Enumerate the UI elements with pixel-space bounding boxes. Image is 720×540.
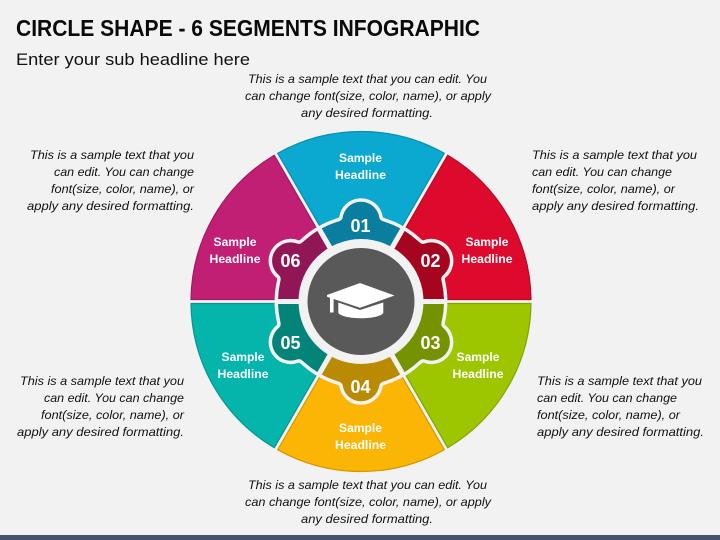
text block: top: can change font(size, color, name), or apply [245, 90, 492, 103]
segment headline 03 [452, 350, 504, 381]
text block: upper right: font(size, color, name), or [532, 183, 676, 196]
text block: lower right [537, 375, 704, 439]
inner segment 01 [322, 202, 400, 248]
inner segment 02 [387, 218, 467, 309]
circle diagram [172, 131, 550, 472]
text block: lower left: apply any desired formatting. [17, 426, 184, 439]
text block: top [245, 73, 492, 120]
text block: upper right: This is a sample text that you [532, 149, 698, 162]
segment headline 04 [335, 421, 386, 452]
text block: lower left: This is a sample text that you [20, 375, 185, 388]
text block: upper left: can edit. You can change [54, 166, 195, 179]
text block: upper left: font(size, color, name), or [51, 183, 195, 196]
segment headline 06 [210, 235, 261, 266]
wedge 01 [278, 131, 444, 249]
text block: top: any desired formatting. [301, 107, 433, 120]
segment headline 06: Headline [210, 252, 261, 266]
numbers: 05 [280, 333, 300, 353]
segment headline 04: Headline [335, 438, 386, 452]
numbered inner ring [255, 202, 467, 401]
text block: upper left: This is a sample text that you [30, 149, 195, 162]
text block: lower left: can edit. You can change [44, 392, 185, 405]
wedge 04 [278, 354, 444, 472]
wedge 06 [172, 144, 357, 347]
text block: lower right: can edit. You can change [537, 392, 678, 405]
segment headline 01 [335, 151, 386, 182]
text block: bottom: any desired formatting. [301, 513, 433, 526]
text block: lower left [17, 375, 185, 439]
text block: lower right: font(size, color, name), or [537, 409, 681, 422]
numbers: 04 [350, 377, 370, 397]
segment headline 01: Sample [339, 151, 382, 165]
subtitle: Enter your sub headline here [16, 50, 250, 69]
segment headline 02: Headline [462, 252, 513, 266]
text block: bottom: This is a sample text that you can edit. You [248, 479, 488, 492]
text block: upper left: apply any desired formatting. [27, 200, 194, 213]
numbers: 03 [420, 333, 440, 353]
wedge 02 [365, 144, 550, 347]
numbers: 06 [280, 251, 300, 271]
text block: upper right: apply any desired formatting. [532, 200, 699, 213]
text block: upper left [27, 149, 195, 213]
text block: lower right: This is a sample text that you [537, 375, 703, 388]
segment headline 03: Headline [452, 367, 504, 381]
text block: bottom: can change font(size, color, name), or apply [245, 496, 492, 509]
inner segment 03 [387, 294, 467, 385]
center hub ring [298, 239, 424, 364]
title: CIRCLE SHAPE - 6 SEGMENTS INFOGRAPHIC [16, 15, 480, 41]
segment headline 01: Headline [335, 168, 386, 182]
segment headline 03: Sample [456, 350, 500, 364]
segment headline 02: Sample [466, 235, 509, 249]
text block: top: This is a sample text that you can edit. You [248, 73, 488, 86]
text block: lower right: apply any desired formatting. [537, 426, 704, 439]
numbers [280, 216, 440, 397]
segment headline 04: Sample [339, 421, 382, 435]
inner segment 06 [255, 218, 335, 309]
segment headline 05: Sample [222, 350, 265, 364]
segment headline 05: Headline [218, 367, 269, 381]
text block: upper right: can edit. You can change [532, 166, 673, 179]
outer wedges [172, 131, 550, 472]
text block: upper right [532, 149, 699, 213]
center hub disc [308, 248, 414, 355]
segment headline 02 [462, 235, 513, 266]
text block: lower left: font(size, color, name), or [41, 409, 185, 422]
numbers: 02 [420, 251, 440, 271]
inner segment 05 [255, 294, 335, 385]
icon: graduation cap [327, 283, 394, 318]
wedge 05 [172, 256, 357, 459]
numbers: 01 [350, 216, 370, 236]
text block: bottom [245, 479, 492, 526]
inner segment 04 [322, 355, 400, 401]
footer bar [0, 535, 720, 540]
wedge 03 [365, 256, 550, 459]
segment headline 05 [218, 350, 269, 381]
segment headline 06: Sample [214, 235, 257, 249]
